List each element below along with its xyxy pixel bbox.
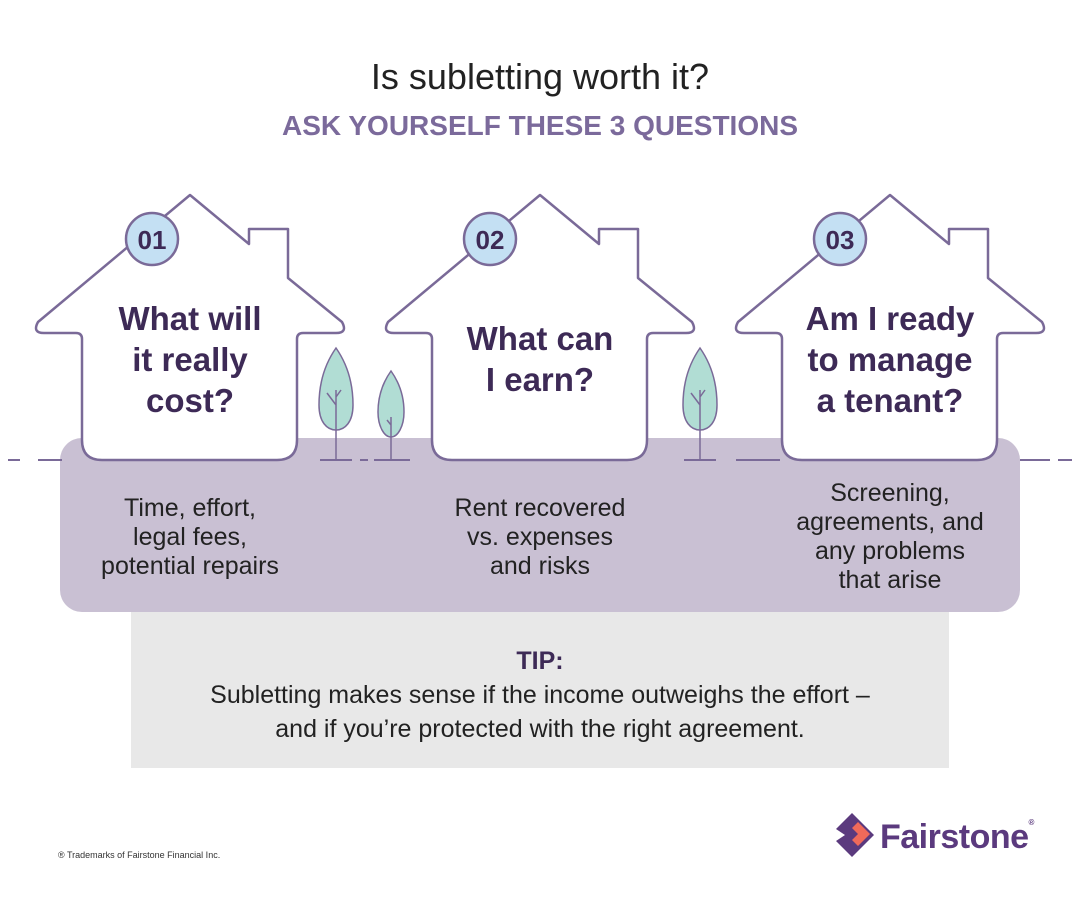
footnote: ® Trademarks of Fairstone Financial Inc. xyxy=(58,850,220,860)
question 3 xyxy=(806,300,974,419)
badge 01: 01 xyxy=(138,225,166,255)
question 1: cost? xyxy=(146,382,234,419)
house 2 xyxy=(386,195,694,460)
badge 02 xyxy=(464,213,516,265)
answer 3: any problems xyxy=(815,537,965,565)
tip text: TIP: xyxy=(516,647,564,675)
badge 03 xyxy=(814,213,866,265)
tip text: Subletting makes sense if the income outweighs the effort – xyxy=(210,681,870,709)
badge 03: 03 xyxy=(826,225,854,255)
subtitle: ASK YOURSELF THESE 3 QUESTIONS xyxy=(282,110,798,141)
answer 1: potential repairs xyxy=(101,552,279,580)
badge 01 xyxy=(126,213,178,265)
question 1: it really xyxy=(132,341,248,378)
answer 2: vs. expenses xyxy=(467,523,613,551)
panel: answers band xyxy=(60,438,1020,612)
answer 3: agreements, and xyxy=(796,508,984,536)
badge 02: 02 xyxy=(476,225,504,255)
icon: fairstone logo mark xyxy=(836,813,874,857)
answer 1: legal fees, xyxy=(133,523,247,551)
question 3: a tenant? xyxy=(817,382,963,419)
icon: tree 2 xyxy=(378,371,404,460)
panel: tip box xyxy=(131,612,949,768)
house 1 xyxy=(36,195,344,460)
icon: tree 3 xyxy=(683,348,717,460)
logo text: Fairstone® xyxy=(880,818,1034,856)
answer 1 xyxy=(101,494,279,580)
question 2: I earn? xyxy=(486,361,594,398)
answer 3: Screening, xyxy=(830,479,950,507)
question 1: What will xyxy=(118,300,262,337)
question 1 xyxy=(118,300,262,419)
question 2: What can xyxy=(467,320,613,357)
house 3 xyxy=(736,195,1044,460)
answer 2: and risks xyxy=(490,552,590,580)
answer 1: Time, effort, xyxy=(124,494,256,522)
answer 3: that arise xyxy=(839,566,941,594)
question 3: to manage xyxy=(807,341,973,378)
tip text xyxy=(210,647,870,743)
question 3: Am I ready xyxy=(806,300,974,337)
question 2 xyxy=(466,320,613,398)
answer 3 xyxy=(796,479,984,594)
answer 2 xyxy=(455,494,625,580)
icon: tree 1 xyxy=(319,348,353,460)
title: Is subletting worth it? xyxy=(371,56,709,97)
answer 2: Rent recovered xyxy=(455,494,625,522)
tip text: and if you’re protected with the right agreement. xyxy=(275,715,805,743)
